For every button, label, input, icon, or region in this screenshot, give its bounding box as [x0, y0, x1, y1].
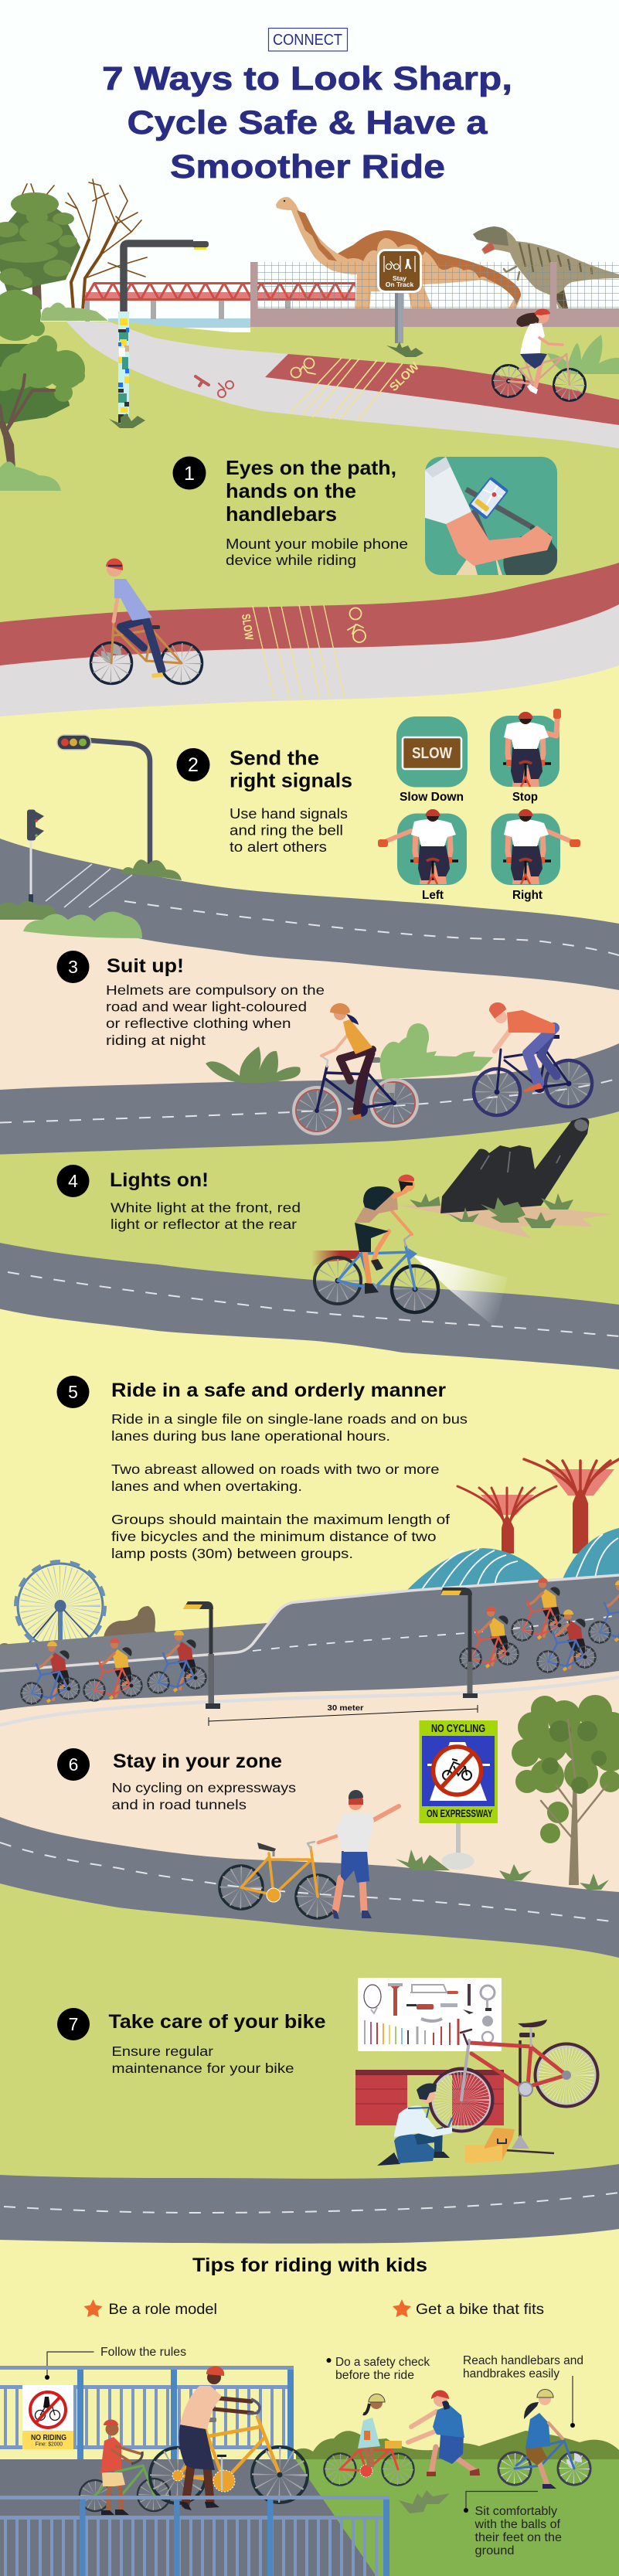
girl on bicycle	[493, 308, 586, 400]
dinosaur: brachiosaurus	[276, 197, 521, 309]
man holding yellow bike	[219, 1790, 399, 1919]
step 6 text: and in road tunnels	[111, 1797, 247, 1812]
group of cyclists one	[22, 1631, 206, 1703]
bush	[380, 1023, 493, 1080]
step 2 text: and ring the bell	[230, 822, 343, 838]
bare tree	[19, 179, 147, 311]
back railing	[0, 2366, 294, 2459]
distance marker: 30 meter: 30 meter	[328, 1704, 364, 1713]
grass	[294, 2459, 619, 2576]
no riding sign: Fine: $2000	[36, 2442, 63, 2447]
step 4 text	[111, 1200, 301, 1232]
light green shrub	[41, 303, 108, 321]
tool board	[358, 1978, 502, 2051]
road at step 6	[0, 1817, 619, 1958]
step 2 number: 2	[188, 754, 199, 776]
cyclist in blue shirt	[91, 558, 202, 683]
raised road with curb	[0, 1575, 619, 1725]
title: 7 Ways to Look Sharp,	[102, 60, 512, 97]
signal: right: Right	[512, 889, 542, 902]
stay on track sign: Stay	[393, 274, 406, 282]
cycling path with slow markings: SLOW	[239, 613, 256, 641]
grassy ground	[0, 322, 619, 680]
step 7 number	[57, 2008, 90, 2040]
bushes bottom left	[0, 901, 142, 938]
step 4 heading: Lights on!	[110, 1169, 209, 1191]
step 1 text	[226, 536, 408, 568]
step 7 heading: Take care of your bike	[108, 2011, 326, 2033]
callout: sit comfortably: their feet on the	[474, 2531, 562, 2544]
step 1 text: Mount your mobile phone	[226, 536, 408, 552]
yellow band behind signals	[0, 611, 619, 955]
step 5 text: lanes during bus lane operational hours.	[111, 1428, 390, 1444]
front railing	[0, 2496, 389, 2576]
signal: slow down: SLOW	[412, 745, 452, 762]
no cycling sign: ON EXPRESSWAY	[427, 1807, 493, 1819]
no cycling sign: NO CYCLING	[431, 1722, 485, 1735]
callout: safety check: Do a safety check	[335, 2356, 430, 2369]
signal: left	[378, 809, 467, 902]
callout: follow the rules: Follow the rules	[100, 2346, 186, 2359]
man cyclist	[474, 1002, 592, 1115]
lamp post far	[440, 1587, 478, 1698]
step 3 text: Helmets are compulsory on the	[106, 982, 325, 998]
stay on track sign: On Track	[386, 281, 413, 288]
no riding sign: NO RIDING	[31, 2434, 66, 2442]
tip 1: role model: Be a role model	[108, 2302, 217, 2318]
step 2 text: Use hand signals	[230, 805, 348, 822]
step 6 text	[111, 1780, 296, 1812]
supertrees	[457, 1459, 619, 1553]
brand tag: CONNECT: CONNECT	[273, 32, 342, 49]
shrub	[206, 1046, 301, 1083]
step 1 heading: hands on the	[226, 479, 356, 502]
callout: follow the rules	[45, 2346, 186, 2380]
callout: reach handlebars: handbrakes easily	[463, 2367, 559, 2380]
group of cyclists two	[461, 1578, 619, 1673]
step 3 number	[57, 951, 90, 983]
distance marker: 30 meter	[209, 1704, 478, 1726]
bushes on the right	[296, 2431, 619, 2459]
woman cyclist	[294, 1003, 417, 1134]
step 5 text: Ride in a single file on single-lane roads and on bus	[111, 1411, 468, 1427]
step 1 heading: Eyes on the path,	[226, 456, 396, 479]
glove sculpture on sand	[400, 1118, 613, 1238]
signal: stop	[490, 709, 561, 804]
yellow band behind kids tips	[0, 2195, 619, 2576]
mechanic	[377, 2084, 452, 2166]
light beam	[412, 1254, 508, 1327]
yellow band behind rule 5	[0, 1275, 619, 1693]
step 5 text: Two abreast allowed on roads with two or more	[111, 1462, 439, 1477]
footpath	[0, 2459, 376, 2576]
step 5 number: 5	[68, 1382, 78, 1402]
step 2 text: to alert others	[230, 839, 327, 855]
gardens domes	[406, 1528, 619, 1591]
ferris wheel	[12, 1561, 105, 1661]
step 5 text: lamp posts (30m) between groups.	[111, 1546, 353, 1561]
tip 2: bike that fits: Get a bike that fits	[416, 2302, 544, 2318]
kneeling parent	[408, 2391, 480, 2476]
title	[102, 60, 512, 185]
step 7 text	[111, 2043, 294, 2076]
bush behind rider	[547, 335, 619, 374]
step 4 number: 4	[68, 1171, 78, 1191]
step 6 text: No cycling on expressways	[111, 1780, 296, 1795]
step 2 heading	[230, 747, 352, 791]
peach band behind suit up	[0, 881, 619, 1121]
signal: left: Left	[422, 889, 444, 902]
tips heading: Tips for riding with kids	[192, 2254, 427, 2276]
signal: stop: Stop	[512, 791, 538, 804]
step 6 number: 6	[69, 1754, 78, 1775]
road at suit up	[0, 1043, 619, 1155]
bicycle on stand	[430, 2020, 598, 2153]
traffic lights	[27, 735, 150, 903]
callout: sit comfortably: ground	[474, 2544, 515, 2557]
girl on blue bike	[498, 2390, 590, 2489]
step 4 text: White light at the front, red	[111, 1200, 301, 1215]
workshop shed	[355, 2070, 504, 2125]
step 4 number	[57, 1165, 90, 1197]
step 5 text: Groups should maintain the maximum length of	[111, 1512, 450, 1527]
step 1 text: device while riding	[226, 552, 356, 568]
step 3 text	[106, 982, 325, 1048]
bush on road edge	[121, 859, 182, 880]
man and yellow bike	[150, 2367, 308, 2510]
step 6 heading: Stay in your zone	[113, 1751, 282, 1772]
no cycling sign	[419, 1720, 498, 1870]
signal: right	[491, 809, 580, 902]
peach band behind rule 6	[0, 1638, 619, 1924]
step 3 text: or reflective clothing when	[106, 1016, 291, 1031]
phone mount illustration	[425, 457, 557, 575]
step 7 text: maintenance for your bike	[111, 2060, 294, 2076]
tip 2: bike that fits	[393, 2299, 544, 2318]
step 3 text: riding at night	[106, 1033, 206, 1048]
cyclist with lights	[311, 1175, 438, 1312]
step 1 number: 1	[184, 463, 195, 485]
stay on track sign	[379, 250, 423, 357]
step 1 number	[173, 456, 206, 490]
brand tag: CONNECT	[269, 28, 348, 51]
cycling path with slow markings	[0, 563, 619, 716]
river	[108, 318, 252, 328]
step 2 heading: right signals	[230, 768, 352, 791]
lamp post near	[183, 1601, 220, 1709]
step 7 number: 7	[69, 2014, 78, 2034]
callout: reach handlebars: Reach handlebars and	[463, 2354, 583, 2367]
small plants at step 6	[396, 1849, 609, 1890]
top park connector path	[66, 321, 619, 448]
no riding sign	[22, 2385, 73, 2449]
road at lights on	[0, 1243, 619, 1370]
step 7 text: Ensure regular	[111, 2043, 213, 2059]
toolbox	[465, 2128, 515, 2163]
step 3 text: road and wear light-coloured	[106, 999, 307, 1014]
green band behind lights on	[0, 1079, 619, 1337]
step 5 text: lanes and when overtaking.	[111, 1479, 302, 1494]
callout: safety check	[326, 2356, 430, 2382]
callout: reach handlebars	[463, 2354, 583, 2428]
step 2 heading: Send the	[230, 747, 319, 770]
callout: sit comfortably	[464, 2492, 562, 2557]
background tree	[0, 192, 80, 309]
step 1 heading: handlebars	[226, 502, 337, 526]
callout: safety check: before the ride	[335, 2369, 414, 2382]
step 3 number: 3	[68, 957, 78, 977]
title: Cycle Safe & Have a	[127, 104, 488, 141]
callout: sit comfortably: Sit comfortably	[474, 2505, 557, 2518]
lower left tree	[0, 290, 85, 491]
step 5 heading: Ride in a safe and orderly manner	[111, 1380, 446, 1401]
brown hedges	[0, 1606, 243, 1668]
road at junction	[0, 839, 619, 990]
callout: sit comfortably: with the balls of	[474, 2518, 561, 2531]
step 3 heading: Suit up!	[107, 955, 184, 977]
step 5 number	[57, 1376, 90, 1408]
step 4 text: light or reflector at the rear	[111, 1217, 297, 1232]
step 5 text: five bicycles and the minimum distance of two	[111, 1529, 436, 1544]
step 6 number	[57, 1748, 90, 1781]
top park connector path: SLOW	[387, 359, 422, 394]
green band behind rule 7	[0, 1851, 619, 2207]
mosaic lamp post	[109, 241, 209, 428]
road at step 7	[0, 2164, 619, 2244]
tip 1: role model	[83, 2299, 217, 2318]
grass tuft	[399, 2490, 450, 2513]
step 2 text	[230, 805, 348, 855]
title: Smoother Ride	[170, 148, 445, 185]
signal: slow down	[396, 716, 468, 804]
child with red bike	[325, 2394, 414, 2486]
wire fence	[250, 262, 619, 328]
tree at step 6	[512, 1695, 619, 1885]
step 2 number	[176, 748, 210, 781]
step 5 text	[111, 1411, 468, 1561]
step 1 heading	[226, 456, 396, 526]
red bridge	[85, 283, 355, 322]
dinosaur: t-rex	[473, 226, 619, 308]
signal: slow down: Slow Down	[400, 791, 464, 804]
kid and green bike	[80, 2420, 170, 2515]
